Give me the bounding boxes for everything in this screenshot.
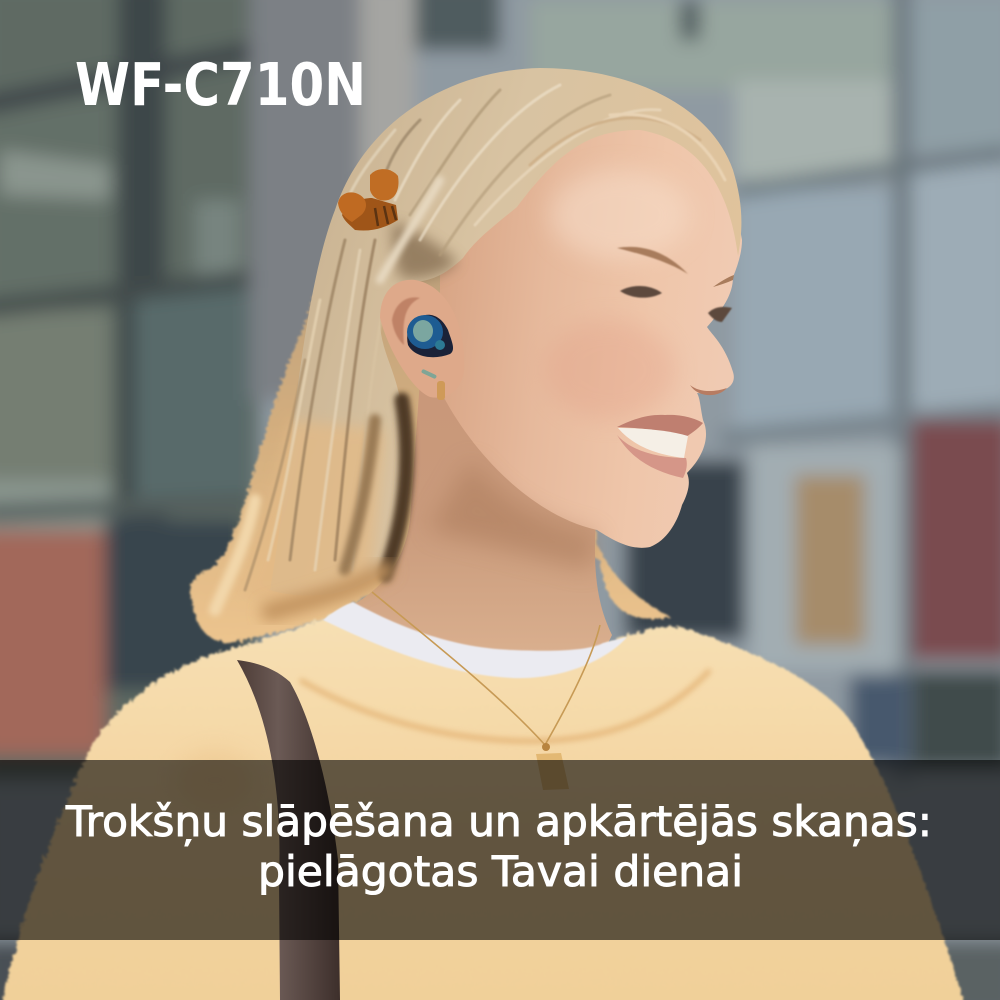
icon: earbud bbox=[407, 315, 453, 357]
teeth bbox=[618, 428, 688, 458]
hair back bbox=[190, 150, 670, 642]
eyebrow bbox=[617, 247, 688, 274]
hair strands bbox=[215, 85, 725, 612]
pendant bbox=[536, 743, 569, 790]
bag strap bbox=[237, 660, 340, 1000]
eye bbox=[620, 286, 662, 298]
sweater shoulder shading bbox=[175, 750, 255, 810]
ear inner shadow bbox=[392, 297, 420, 345]
caption line 2: pielāgotas Tavai dienai bbox=[258, 847, 743, 896]
caption line 1: Trokšņu slāpēšana un apkārtējās skaņas: bbox=[65, 797, 932, 846]
jaw shadow bbox=[430, 460, 597, 570]
sweater bbox=[0, 615, 975, 1000]
caption band bbox=[0, 760, 1000, 940]
neck bbox=[355, 380, 612, 660]
face bbox=[440, 122, 742, 548]
upper lip bbox=[617, 415, 703, 437]
hair clip bbox=[338, 169, 399, 231]
far eye bbox=[708, 307, 732, 322]
forehead highlight bbox=[550, 170, 690, 260]
cheek blush bbox=[545, 320, 675, 420]
earrings bbox=[421, 369, 445, 400]
title: WF-C710N bbox=[75, 50, 366, 119]
far eyebrow bbox=[713, 275, 734, 287]
ear bbox=[380, 280, 464, 398]
nose shadow bbox=[690, 385, 727, 395]
sweater collar shading bbox=[300, 670, 710, 741]
hair top bbox=[270, 68, 741, 596]
hair shadow above ear bbox=[392, 222, 458, 279]
face features bbox=[430, 170, 734, 570]
caption text bbox=[65, 797, 932, 896]
white t-shirt bbox=[323, 602, 627, 678]
necklace bbox=[372, 592, 600, 745]
lower lip bbox=[617, 435, 687, 478]
lower hair warm tone bbox=[240, 420, 385, 610]
